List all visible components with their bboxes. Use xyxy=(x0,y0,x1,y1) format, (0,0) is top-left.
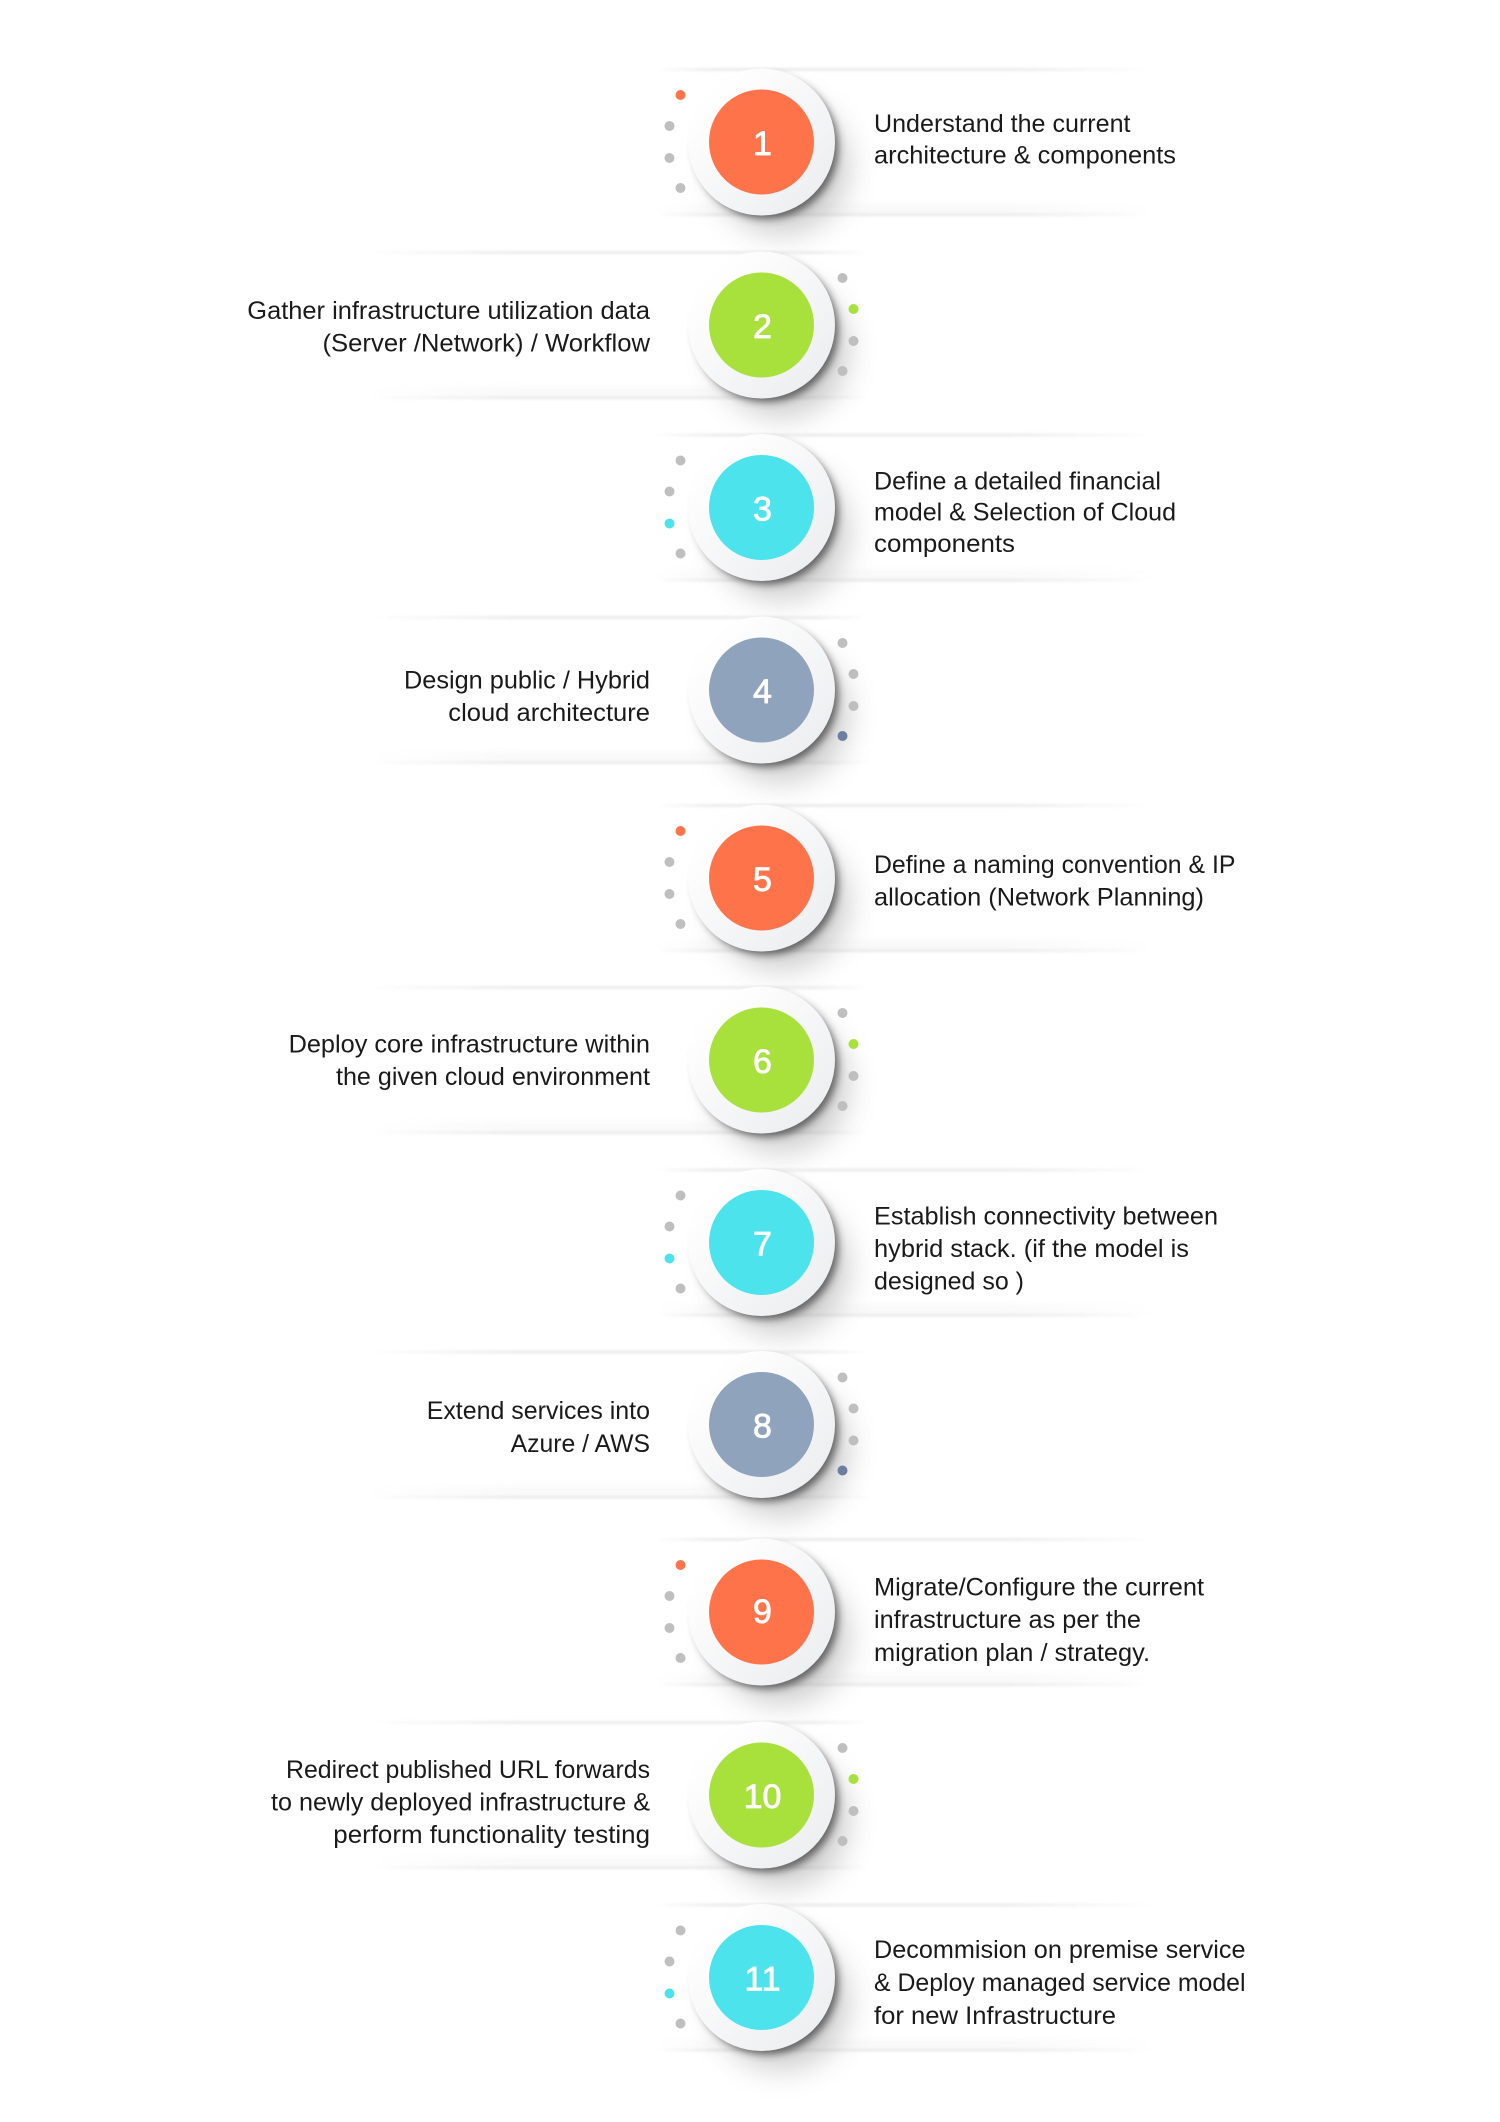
step 1 xyxy=(654,68,1176,233)
dots xyxy=(838,1372,858,1476)
description: Migrate/Configure the current xyxy=(874,1573,1204,1601)
dots xyxy=(664,1560,686,1663)
dots xyxy=(664,456,686,558)
badge: 3 xyxy=(688,434,848,598)
badge: 9: 9 xyxy=(753,1593,772,1631)
description: Understand the current xyxy=(874,110,1131,138)
badge: 8: 8 xyxy=(753,1408,772,1446)
step 3 xyxy=(654,434,1176,598)
badge: 4 xyxy=(688,616,848,781)
step 5 xyxy=(654,804,1235,969)
badge: 5: 5 xyxy=(753,861,772,899)
description xyxy=(874,468,1176,558)
description: Redirect published URL forwards xyxy=(286,1756,650,1784)
band xyxy=(364,251,870,399)
description: architecture & components xyxy=(874,141,1176,169)
description: the given cloud environment xyxy=(336,1063,650,1091)
step 2 xyxy=(247,251,870,416)
description: Gather infrastructure utilization data xyxy=(247,297,650,325)
dots xyxy=(838,1008,858,1111)
badge: 10 xyxy=(688,1722,848,1886)
badge: 8 xyxy=(688,1351,848,1516)
description: components xyxy=(874,530,1015,558)
badge: 4: 4 xyxy=(753,673,772,711)
badge: 2 xyxy=(688,252,848,416)
badge: 1: 1 xyxy=(753,125,772,163)
step 10 xyxy=(271,1721,870,1886)
description: Deploy core infrastructure within xyxy=(289,1030,650,1058)
badge: 11 xyxy=(688,1904,848,2068)
description: Decommision on premise service xyxy=(874,1936,1246,1964)
badge: 1 xyxy=(688,68,848,233)
description: hybrid stack. (if the model is xyxy=(874,1235,1189,1263)
description xyxy=(874,851,1235,912)
description: to newly deployed infrastructure & xyxy=(271,1788,650,1816)
description: for new Infrastructure xyxy=(874,2002,1116,2030)
description: model & Selection of Cloud xyxy=(874,499,1176,527)
description xyxy=(874,1202,1218,1295)
step 4 xyxy=(364,616,870,781)
description xyxy=(271,1756,650,1849)
band xyxy=(654,434,1158,582)
badge: 6 xyxy=(688,986,848,1151)
dots xyxy=(838,638,858,741)
description: & Deploy managed service model xyxy=(874,1969,1246,1997)
description xyxy=(289,1030,650,1091)
description: Azure / AWS xyxy=(511,1430,650,1458)
dots xyxy=(838,1743,858,1846)
step 9 xyxy=(654,1538,1204,1703)
description: (Server /Network) / Workflow xyxy=(322,329,651,357)
step 7 xyxy=(654,1168,1218,1334)
step 8 xyxy=(364,1350,870,1516)
badge: 2: 2 xyxy=(753,308,772,346)
description xyxy=(874,1573,1204,1667)
band xyxy=(654,804,1158,952)
badge: 3: 3 xyxy=(753,490,772,528)
badge: 5 xyxy=(688,804,848,969)
description: Define a detailed financial xyxy=(874,468,1161,496)
badge: 11: 11 xyxy=(744,1960,780,1998)
description xyxy=(874,110,1176,169)
dots xyxy=(664,1190,686,1294)
badge: 7: 7 xyxy=(753,1226,772,1264)
step 6 xyxy=(289,986,870,1151)
description: Extend services into xyxy=(427,1397,650,1425)
description xyxy=(404,666,650,727)
band xyxy=(654,1904,1158,2052)
badge: 6: 6 xyxy=(753,1043,772,1081)
dots xyxy=(664,90,686,193)
description: perform functionality testing xyxy=(333,1821,650,1849)
description xyxy=(247,297,651,357)
dots xyxy=(664,1926,686,2028)
band xyxy=(364,986,870,1134)
band xyxy=(364,1350,870,1498)
badge: 10: 10 xyxy=(744,1778,781,1816)
description: cloud architecture xyxy=(448,699,650,727)
band xyxy=(654,1538,1158,1686)
description: migration plan / strategy. xyxy=(874,1639,1150,1667)
band xyxy=(654,1168,1158,1316)
step 11 xyxy=(654,1904,1246,2068)
description: Establish connectivity between xyxy=(874,1202,1218,1230)
description xyxy=(874,1936,1246,2030)
dots xyxy=(664,826,686,929)
band xyxy=(364,616,870,764)
description xyxy=(427,1397,650,1458)
band xyxy=(654,68,1158,216)
description: infrastructure as per the xyxy=(874,1606,1141,1634)
description: designed so ) xyxy=(874,1267,1024,1295)
description: Design public / Hybrid xyxy=(404,666,650,694)
description: allocation (Network Planning) xyxy=(874,884,1204,912)
dots xyxy=(838,273,858,376)
badge: 9 xyxy=(688,1538,848,1703)
badge: 7 xyxy=(688,1169,848,1334)
band xyxy=(364,1721,870,1869)
description: Define a naming convention & IP xyxy=(874,851,1235,879)
